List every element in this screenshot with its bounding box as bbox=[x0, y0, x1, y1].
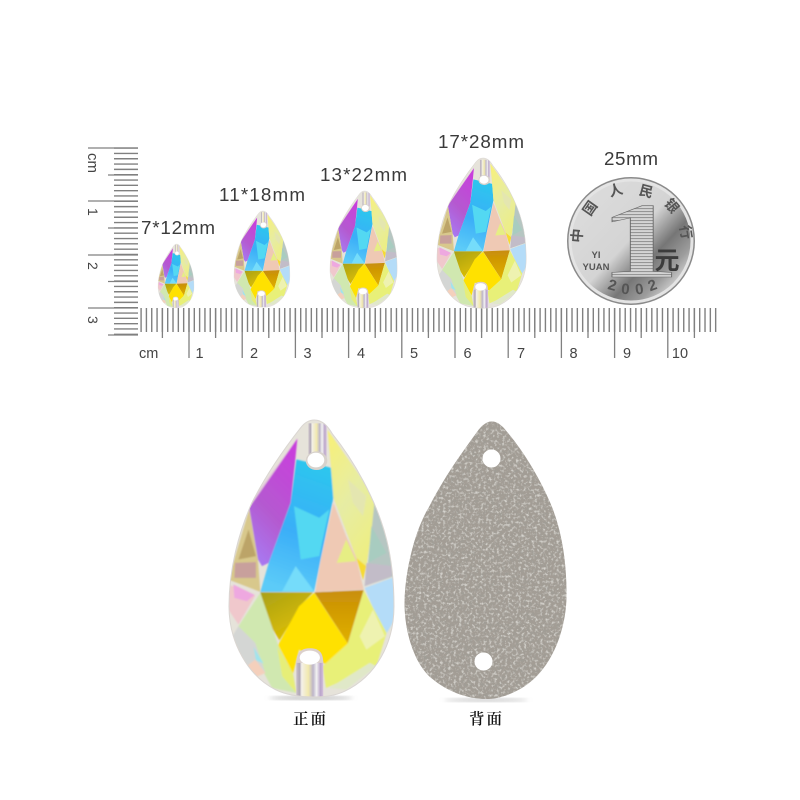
coin: 1 yuan: 2 bbox=[606, 276, 618, 295]
gem: 11*18mm bbox=[233, 210, 292, 309]
front gem shadow bbox=[269, 696, 353, 700]
vertical ruler: 2 bbox=[85, 262, 101, 270]
size labels: 13*22mm bbox=[320, 164, 407, 185]
coin: 1 yuan: 0 bbox=[634, 281, 645, 299]
horizontal ruler: 7 bbox=[517, 346, 525, 362]
horizontal ruler bbox=[139, 308, 717, 362]
coin: 1 yuan: 民 bbox=[637, 180, 656, 203]
vertical ruler: 1 bbox=[85, 208, 101, 216]
horizontal ruler: cm bbox=[139, 346, 158, 362]
large gem: front bbox=[225, 416, 400, 703]
horizontal ruler: 8 bbox=[569, 346, 578, 362]
size labels: 17*28mm bbox=[438, 131, 524, 152]
horizontal ruler: 9 bbox=[623, 346, 631, 362]
large gem: back bbox=[404, 421, 567, 699]
horizontal ruler: 3 bbox=[303, 346, 312, 362]
caption: back: 背面 bbox=[469, 707, 502, 729]
horizontal ruler: 2 bbox=[250, 346, 258, 362]
vertical ruler: 3 bbox=[85, 316, 101, 324]
size labels bbox=[141, 131, 658, 238]
coin: 1 yuan: YI bbox=[592, 250, 600, 261]
gem: 7*12mm bbox=[157, 243, 195, 309]
size labels: 7*12mm bbox=[141, 217, 215, 238]
gem: 13*22mm bbox=[328, 189, 400, 311]
horizontal ruler: 4 bbox=[357, 346, 365, 362]
coin: 1 yuan: 人 bbox=[606, 179, 625, 202]
coin: 1 yuan: 银 bbox=[660, 194, 684, 218]
horizontal ruler: 1 bbox=[195, 346, 204, 362]
caption: front: 正面 bbox=[293, 707, 326, 729]
size labels: 25mm bbox=[604, 148, 658, 169]
coin: 1 yuan: 国 bbox=[578, 197, 602, 220]
vertical ruler bbox=[84, 147, 138, 336]
coin: 1 yuan: 行 bbox=[675, 224, 697, 241]
coin: 1 yuan: 2 bbox=[646, 276, 659, 295]
gem: 17*28mm bbox=[435, 156, 529, 311]
coin: 1 yuan: 中 bbox=[566, 228, 588, 243]
vertical ruler: cm bbox=[84, 153, 101, 173]
coin: 1 yuan: 0 bbox=[620, 281, 630, 298]
horizontal ruler: 10 bbox=[672, 346, 688, 362]
coin: 1 yuan: YUAN bbox=[583, 262, 610, 273]
coin: 1 yuan: 元 bbox=[654, 241, 680, 277]
back shadow bbox=[444, 698, 528, 702]
coin: 1 yuan: 1 bbox=[599, 181, 680, 301]
horizontal ruler: 5 bbox=[410, 346, 418, 362]
coin: 1 yuan bbox=[566, 177, 697, 305]
size labels: 11*18mm bbox=[219, 184, 305, 205]
horizontal ruler: 6 bbox=[463, 346, 472, 362]
